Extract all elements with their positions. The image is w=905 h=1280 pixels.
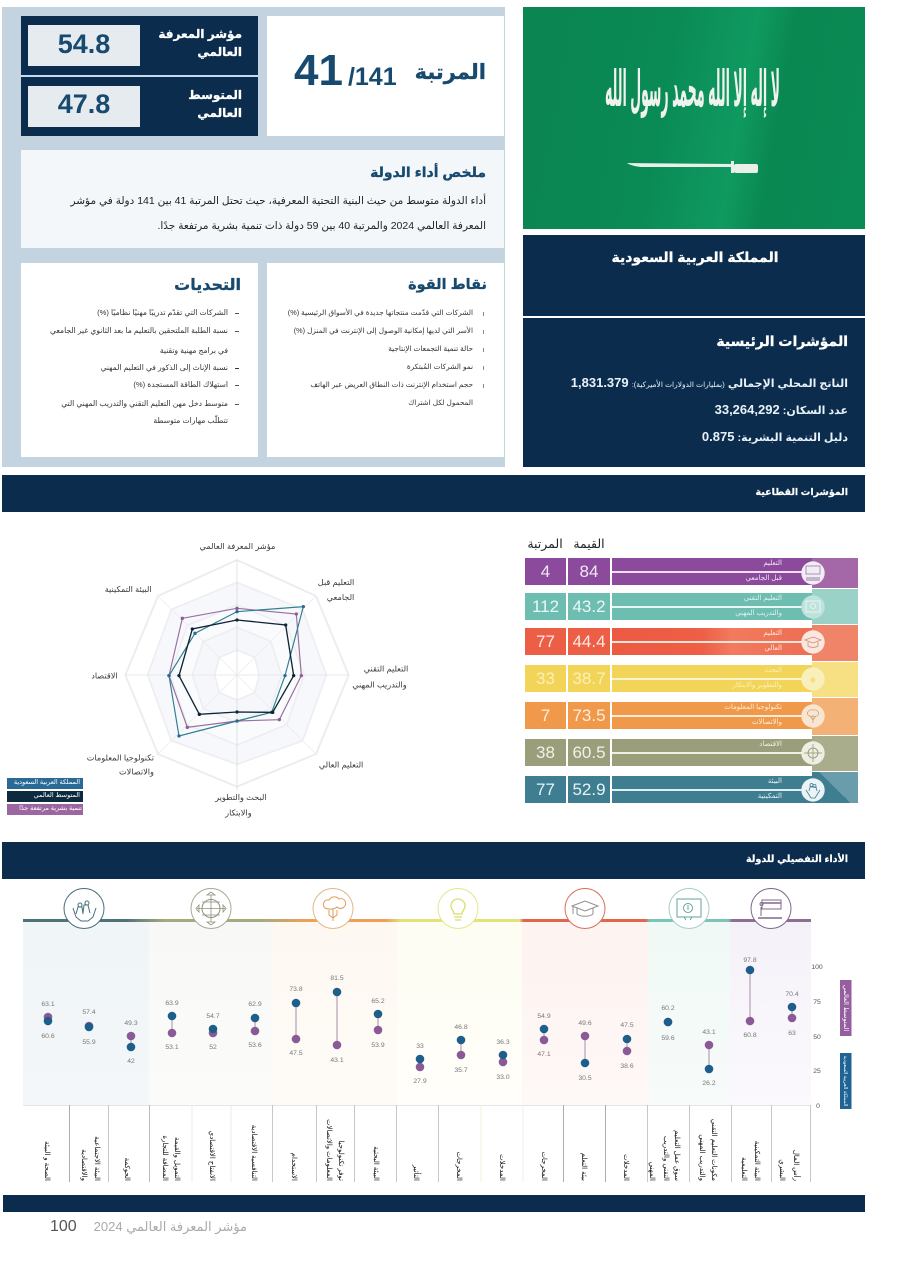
summary text: أداء الدولة متوسط من حيث البنية التحتية المعرفية، حيث تحتل المرتبة 41 بين 141 دولة في مؤشر — [70, 195, 486, 207]
rotated indicator labels: المدخلات — [622, 1154, 629, 1181]
rotated indicator labels: المضافة للتجارة — [161, 1135, 168, 1181]
lollipop chart — [23, 888, 852, 1182]
rotated indicator labels: مكونات التعليم التقني — [710, 1119, 718, 1181]
page number: 100 — [50, 1218, 77, 1235]
row: ICT: والاتصالات — [752, 719, 782, 726]
section heading: detailed performance: الأداء التفصيلي للدولة — [746, 854, 848, 865]
radar legend: تنمية بشرية مرتفعة جدًا — [19, 805, 82, 812]
legend: global average: المتوسط العالمي — [842, 985, 849, 1031]
section heading: sector indicators: المؤشرات القطاعية — [756, 487, 848, 498]
column headers — [527, 537, 605, 551]
panel: rank — [267, 16, 504, 136]
radar legend — [7, 778, 83, 815]
value labels: 43.1 — [330, 1057, 344, 1064]
row: research and innovation: 33 — [536, 669, 555, 688]
score: global knowledge index: مؤشر المعرفة — [158, 27, 242, 41]
colored top rule — [23, 919, 811, 922]
score: global knowledge index — [28, 25, 242, 66]
y axis labels: 25 — [813, 1068, 821, 1075]
rotated indicator labels: والتدريب المهني — [698, 1134, 705, 1181]
rotated indicator labels: المدخلات — [498, 1154, 505, 1181]
rotated indicator labels: المهني — [648, 1162, 655, 1181]
panel: strengths — [267, 263, 504, 457]
value labels: 70.4 — [785, 991, 799, 998]
value labels: 33 — [416, 1043, 424, 1050]
row: economy: 38 — [536, 743, 555, 762]
radar axis labels — [87, 542, 408, 817]
table grid — [23, 1105, 811, 1182]
y axis labels: 0 — [816, 1103, 820, 1110]
rank label: المرتبة — [415, 61, 486, 84]
icon: research and innovation — [438, 888, 478, 928]
row: enabling environment: 77 — [536, 780, 555, 799]
row: higher education: 44.4 — [572, 632, 606, 651]
legend: Saudi Arabia: المملكة العربية السعودية — [842, 1056, 848, 1106]
rotated indicator labels: التمويل والقيمة — [173, 1137, 180, 1181]
panel: country name — [523, 235, 865, 316]
icon: tree network — [801, 704, 825, 728]
radar axis labels: البحث والتطوير — [214, 793, 267, 802]
row: enabling environment — [525, 772, 858, 803]
radar axis labels: والتدريب المهني — [352, 680, 407, 689]
series: global average — [177, 618, 295, 716]
y axis labels — [811, 964, 823, 1110]
summary heading: ملخص أداء الدولة — [370, 164, 486, 180]
radar chart — [87, 542, 408, 818]
rotated indicator labels: والاقتصادية — [80, 1149, 87, 1181]
footer title: مؤشر المعرفة العالمي 2024 — [94, 1219, 247, 1234]
strengths list: نمو الشركات المُبتكرة — [407, 362, 473, 371]
rotated indicator labels: البيئة التمكينية — [753, 1141, 761, 1181]
row: ICT: 73.5 — [572, 706, 606, 725]
icon: pre-university education — [751, 888, 791, 928]
score: global knowledge index: العالمي — [197, 45, 242, 59]
row: TVET: 112 — [532, 597, 559, 616]
rotated indicator labels: الانفتاح الاقتصادي — [208, 1131, 215, 1181]
icon: light bulb — [801, 667, 825, 691]
icon: enabling environment — [64, 888, 104, 928]
panel: country overview background — [2, 7, 505, 467]
flag of Saudi Arabia — [523, 7, 865, 229]
row: research and innovation: والتطوير والابتكار — [733, 682, 782, 689]
panel: performance summary — [21, 150, 504, 248]
row: TVET: التعليم التقني — [744, 595, 782, 602]
lollipops: indicators — [131, 970, 792, 1069]
radar axis labels: والابتكار — [224, 808, 252, 817]
value labels: 53.1 — [165, 1044, 179, 1051]
row: enabling environment: البيئة — [768, 778, 782, 785]
score: global average: 47.8 — [58, 89, 110, 119]
row: pre-university education: 84 — [580, 562, 598, 581]
value labels: 63 — [788, 1030, 796, 1037]
icon: TVET — [669, 888, 709, 928]
key indicators heading: المؤشرات الرئيسية — [716, 333, 848, 349]
icon: globe arrows — [801, 741, 825, 765]
colored background bands — [23, 920, 811, 1105]
panel: challenges — [21, 263, 258, 457]
value labels: 42 — [127, 1058, 135, 1065]
value labels: 33.0 — [496, 1074, 510, 1081]
row: pre-university education: 4 — [541, 562, 550, 581]
rotated indicator labels: التنافسية الاقتصادية — [250, 1125, 257, 1181]
score: global average: المتوسط — [188, 88, 242, 102]
row: higher education: 77 — [536, 632, 555, 651]
icon: people in hands — [801, 778, 825, 802]
rotated indicator labels: التعليمية — [740, 1157, 747, 1181]
value labels: 55.9 — [82, 1039, 96, 1046]
value labels: 81.5 — [330, 975, 344, 982]
rotated indicator labels: البشري — [778, 1159, 785, 1181]
radar axis labels: التعليم قبل — [318, 578, 354, 587]
legend: global average — [840, 980, 852, 1036]
value labels: 62.9 — [248, 1001, 262, 1008]
column headers: القيمة — [573, 537, 605, 551]
strengths list: حالة تنمية التجمعات الإنتاجية — [388, 344, 473, 353]
challenges list: متوسط دخل مهن التعليم التقني والتدريب المهني التي — [61, 399, 228, 408]
series: very high human development — [167, 607, 303, 729]
radar legend: المتوسط العالمي — [34, 792, 80, 799]
challenges list: نسبة الإناث إلى الذكور في التعليم المهني — [101, 363, 228, 372]
value labels: 30.5 — [578, 1075, 592, 1082]
row: higher education: العالي — [764, 645, 782, 652]
value labels: 63.9 — [165, 1000, 179, 1007]
radar axis labels: البيئة التمكينية — [105, 585, 152, 594]
value labels: 52 — [209, 1044, 217, 1051]
legend: Saudi Arabia — [840, 1053, 852, 1109]
blue markers — [44, 966, 796, 1073]
section heading: sector indicators — [2, 475, 865, 512]
radar axis labels: التعليم التقني — [364, 664, 408, 673]
y axis labels: 75 — [813, 999, 821, 1006]
row: higher education: التعليم — [763, 630, 782, 637]
value labels: 65.2 — [371, 998, 385, 1005]
row: enabling environment: التمكينية — [758, 793, 782, 800]
icon: tvet screen — [801, 595, 825, 619]
strengths list: حجم استخدام الإنترنت ذات النطاق العريض عبر الهاتف — [310, 380, 473, 389]
value labels: 59.6 — [661, 1035, 675, 1042]
rotated indicator labels: المخرجات — [540, 1151, 547, 1181]
section heading: detailed performance — [2, 842, 865, 879]
value labels: 97.8 — [743, 957, 757, 964]
icon: graduation cap — [801, 630, 825, 654]
sword — [627, 161, 758, 173]
value labels: 63.1 — [41, 1001, 55, 1008]
y axis labels: 100 — [811, 964, 823, 971]
challenges list: الشركات التي تقدّم تدريبًا مهنيًا نظاميًا (%) — [97, 308, 228, 317]
summary text: المعرفة العالمي 2024 والمرتبة 40 بين 59 دولة ذات تنمية بشرية مرتفعة جدًا. — [157, 220, 486, 232]
row: research and innovation: البحث — [764, 667, 782, 674]
panel: country name: المملكة العربية السعودية — [612, 249, 778, 265]
summary text — [70, 194, 486, 232]
value labels: 60.8 — [743, 1032, 757, 1039]
value labels: 47.5 — [620, 1022, 634, 1029]
value labels: 53.9 — [371, 1042, 385, 1049]
row: ICT — [525, 698, 858, 735]
panel: key indicators — [523, 318, 865, 467]
rotated indicator labels: بيئة التعلم — [580, 1153, 587, 1181]
value labels: 60.2 — [661, 1005, 675, 1012]
radar axis labels: الاقتصاد — [91, 671, 118, 680]
score: global knowledge index: 54.8 — [58, 29, 110, 59]
radar axis labels: والاتصالات — [119, 768, 154, 777]
rotated indicator labels: توفر تكنولوجيا — [337, 1140, 345, 1181]
challenges heading: التحديات — [174, 277, 241, 294]
value labels: 57.4 — [82, 1009, 96, 1016]
rotated indicator labels: الحوكمة — [123, 1158, 131, 1181]
icon: ICT — [313, 888, 353, 928]
rotated indicator labels: رأس المال — [792, 1150, 801, 1181]
rotated indicator labels: البيئة الاجتماعية — [93, 1136, 100, 1181]
rank value: 41/141 — [294, 46, 397, 95]
icon: economy — [191, 888, 231, 928]
score: global average: العالمي — [197, 106, 242, 120]
value labels: 53.6 — [248, 1042, 262, 1049]
challenges list: نسبة الطلبة الملتحقين بالتعليم ما بعد الثانوي غير الجامعي — [50, 326, 228, 335]
value labels — [41, 957, 799, 1087]
radar axis labels: الجامعي — [327, 593, 354, 602]
series: Saudi Arabia — [167, 605, 305, 738]
value labels: 47.5 — [289, 1050, 303, 1057]
strengths heading: نقاط القوة — [408, 277, 487, 293]
radar axis labels: تكنولوجيا المعلومات — [87, 754, 154, 763]
row: research and innovation — [525, 662, 858, 697]
value labels: 43.1 — [702, 1029, 716, 1036]
row: TVET: والتدريب المهني — [735, 610, 782, 617]
column headers: المرتبة — [527, 537, 563, 551]
value labels: 26.2 — [702, 1080, 716, 1087]
rotated indicator labels: الصحة و البيئة — [43, 1141, 50, 1181]
rotated indicator labels: التأثير — [412, 1164, 422, 1181]
value labels: 27.9 — [413, 1078, 427, 1085]
strengths list: الشركات التي قدّمت منتجاتها جديدة في الأسواق الرئيسية (%) — [288, 308, 473, 317]
panel: knowledge index scores — [21, 16, 258, 136]
sector table — [525, 537, 858, 803]
value labels: 47.1 — [537, 1051, 551, 1058]
purple markers — [44, 1013, 796, 1071]
indicator: population: عدد السكان: 33,264,292 — [715, 402, 848, 417]
row: pre-university education: قبل الجامعي — [746, 575, 782, 582]
y axis labels: 50 — [813, 1034, 821, 1041]
row: ICT: تكنولوجيا المعلومات — [724, 704, 782, 711]
rotated indicator labels: المعلومات والاتصالات — [325, 1119, 332, 1181]
row: economy — [525, 736, 858, 771]
challenges list: استهلاك الطاقة المستجدة (%) — [133, 380, 228, 389]
score: global average — [28, 86, 242, 127]
rotated indicator labels: البيئة البحثية — [372, 1146, 379, 1181]
icon: higher education — [565, 888, 605, 928]
value labels: 49.6 — [578, 1020, 592, 1027]
rotated indicator labels: التقني والتدريب — [662, 1136, 669, 1181]
indicator: GDP: الناتج المحلي الإجمالي (بمليارات الدولارات الأميركية): 1,831.379 — [571, 375, 848, 390]
row: economy: 60.5 — [572, 743, 606, 762]
row: TVET: 43.2 — [572, 597, 606, 616]
rotated indicator labels: الاستخدام — [290, 1153, 297, 1181]
radar axis labels: مؤشر المعرفة العالمي — [200, 542, 275, 551]
value labels: 38.6 — [620, 1063, 634, 1070]
row: research and innovation: 38.7 — [572, 669, 606, 688]
challenges list: تتطلّب مهارات متوسطة — [153, 416, 228, 425]
value labels: 54.9 — [537, 1013, 551, 1020]
value labels: 60.6 — [41, 1033, 55, 1040]
rotated indicator labels — [43, 1119, 801, 1181]
row: ICT: 7 — [541, 706, 550, 725]
strengths list: المحمول لكل اشتراك — [408, 398, 473, 407]
value labels: 46.8 — [454, 1024, 468, 1031]
row: higher education — [525, 625, 858, 661]
radar axis labels: التعليم العالي — [319, 760, 363, 769]
value labels: 35.7 — [454, 1067, 468, 1074]
strengths list — [288, 308, 484, 407]
rotated indicator labels: المخرجات — [455, 1151, 462, 1181]
indicator: HDI: دليل التنمية البشرية: 0.875 — [702, 429, 848, 444]
value labels: 36.3 — [496, 1039, 510, 1046]
footer bar — [3, 1195, 865, 1212]
value labels: 73.8 — [289, 986, 303, 993]
row: TVET — [525, 589, 858, 624]
row: enabling environment: 52.9 — [572, 780, 606, 799]
icon: classroom — [801, 561, 825, 585]
challenges list: في برامج مهنية وتقنية — [160, 346, 228, 355]
row: pre-university education: التعليم — [763, 560, 782, 567]
value labels: 49.3 — [124, 1020, 138, 1027]
row: pre-university education — [525, 558, 858, 588]
challenges list — [50, 308, 239, 425]
strengths list: الأسر التي لديها إمكانية الوصول إلى الإنترنت في المنزل (%) — [294, 326, 473, 335]
radar legend: المملكة العربية السعودية — [14, 779, 80, 786]
row: economy: الاقتصاد — [759, 741, 782, 748]
value labels: 54.7 — [206, 1013, 220, 1020]
rotated indicator labels: سوق عمل التعليم — [673, 1130, 680, 1181]
